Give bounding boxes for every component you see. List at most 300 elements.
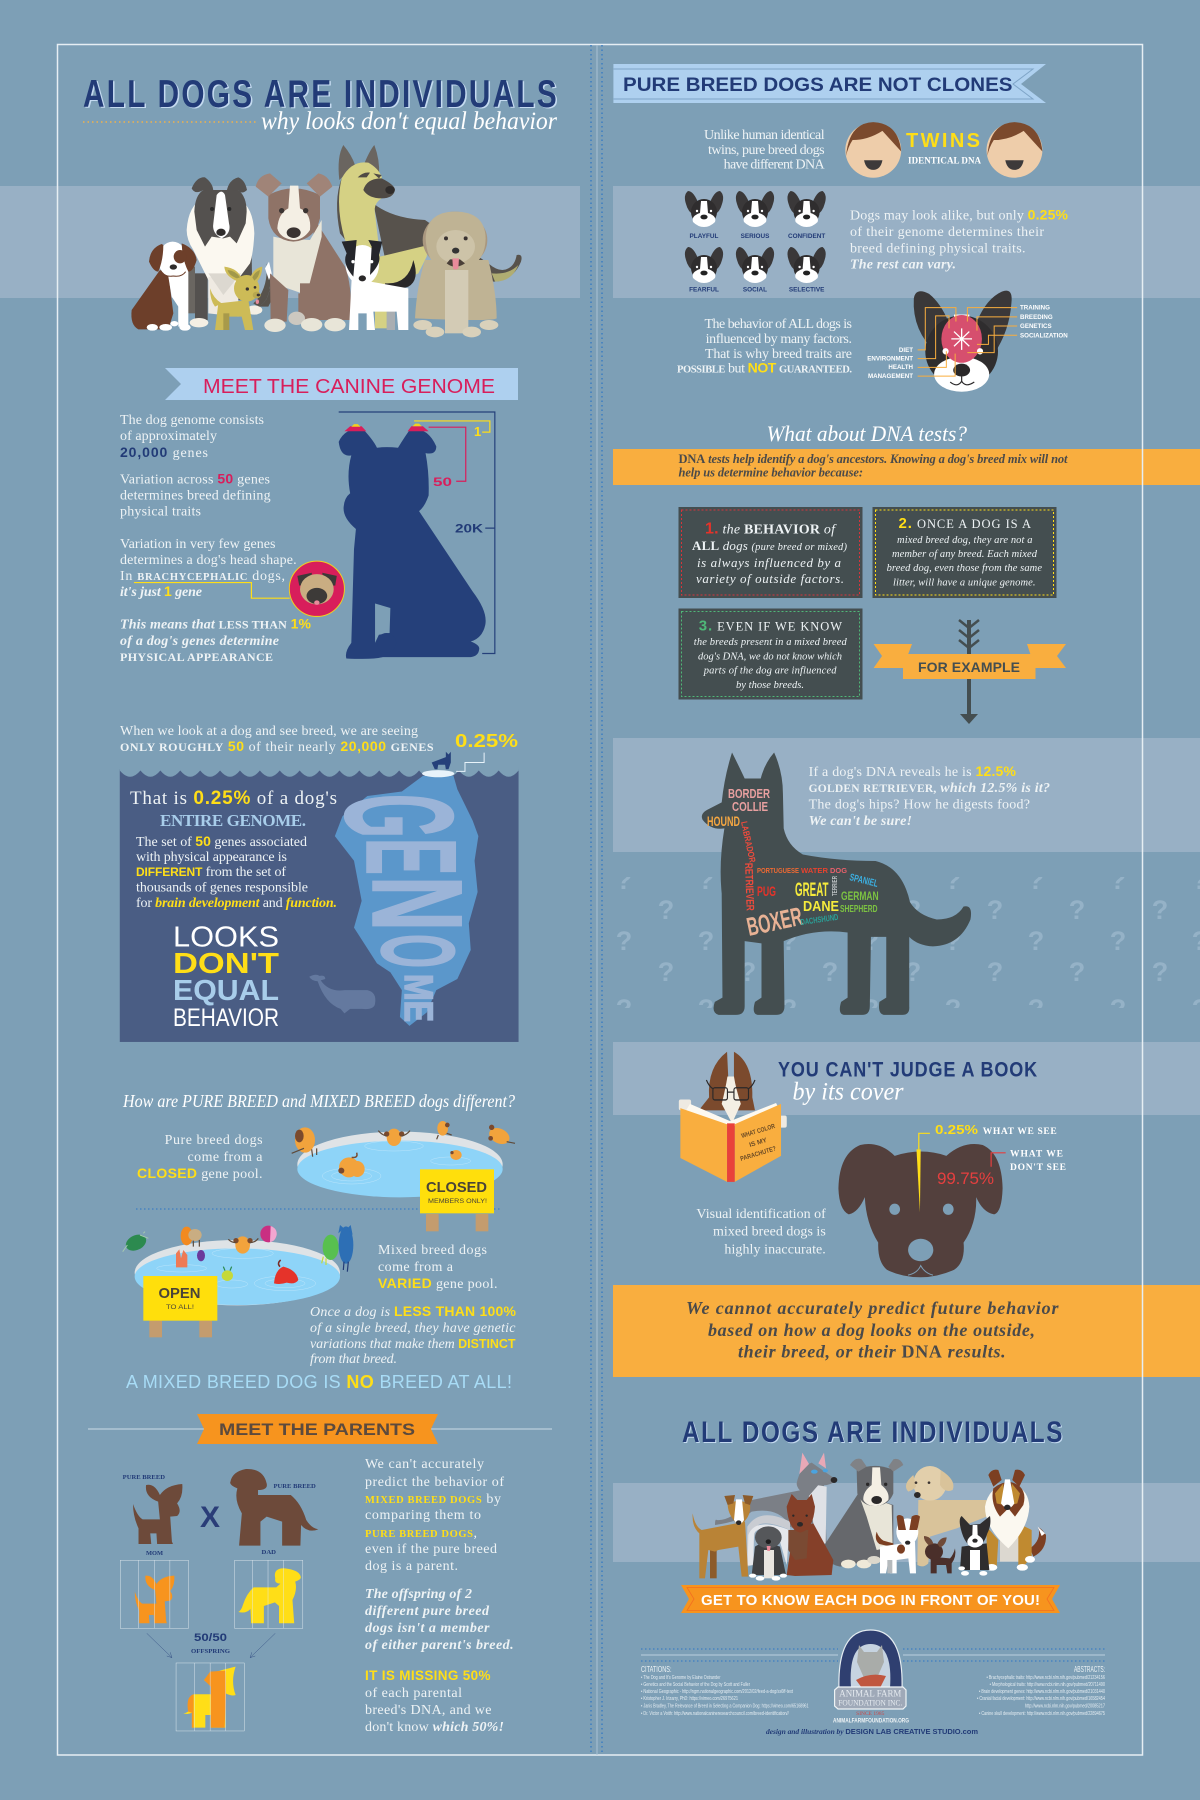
breed names: GERMAN: [841, 889, 879, 903]
text: visual identification: Visual identification of: [696, 1207, 826, 1222]
text: look alike: [850, 206, 1069, 273]
text: parents explanation: comparing them to: [365, 1508, 481, 1523]
chart labels: 1, 50, 20K: [433, 424, 483, 536]
decoration: question mark pattern: ?: [905, 895, 921, 925]
cages: [120, 1560, 303, 1731]
diagram labels: PURE BREED: [274, 1483, 316, 1490]
decoration: question mark pattern: ?: [822, 957, 838, 987]
text: twins: twins, pure breed dogs: [708, 143, 825, 158]
text: parents explanation: don't know which 50%!: [365, 1720, 504, 1735]
illustration: dog reading book: PARACHUTE?: [740, 1145, 777, 1163]
panel copy: with physical appearance is: [136, 850, 287, 865]
sign: closed: [426, 1214, 439, 1231]
title: ALL DOGS ARE INDIVIDUALS: [83, 73, 559, 116]
background bands: [0, 186, 1200, 1562]
decoration: question mark pattern: ?: [658, 895, 674, 925]
slogan: looks don't equal behavior: [173, 921, 279, 1032]
banner: pure breed dogs are not clones: PURE BREED DOGS ARE NOT CLONES: [623, 74, 1012, 96]
illustration: closed gene pool: [292, 1121, 515, 1231]
illustration: dog reading book: WHAT COLOR: [741, 1123, 776, 1140]
panel: reason 2: litter, will have a unique genome.: [893, 578, 1036, 588]
decoration: question mark pattern: ?: [863, 926, 879, 956]
banner: meet the canine genome: MEET THE CANINE GENOME: [203, 376, 495, 398]
text: parents explanation: [365, 1457, 514, 1735]
panel: reason 2: 2. ONCE A DOG IS A: [898, 515, 1031, 532]
dog: jack russell spotted: [876, 1515, 920, 1573]
slogan: looks don't equal behavior: EQUAL: [173, 975, 279, 1007]
panel: reason 3: [678, 608, 862, 700]
panel: reason 1: 1. the BEHAVIOR of: [705, 521, 837, 538]
decoration: question mark pattern: ?: [905, 957, 921, 987]
factor labels: HEALTH: [888, 364, 914, 371]
text block: genome facts: 20,000 genes: [120, 444, 208, 461]
panel: reason 3: the breeds present in a mixed breed: [694, 637, 848, 648]
banner: get to know each dog: [681, 1585, 1060, 1613]
dog: husky: [715, 1453, 837, 1567]
factor labels: DIET: [899, 347, 913, 354]
text: parents explanation: dog is a parent.: [365, 1559, 458, 1574]
text block: genome facts: [120, 413, 312, 664]
text: DNA test intro: [678, 452, 1068, 480]
text block: genome facts: physical traits: [120, 505, 201, 520]
banner: for example: FOR EXAMPLE: [918, 659, 1020, 675]
decoration: question mark pattern: ?: [1028, 994, 1044, 1024]
text: look alike: of their genome determines their: [850, 225, 1044, 240]
banner: for example: [874, 644, 1066, 679]
breed names: HOUND: [707, 813, 740, 829]
banner: meet the parents: MEET THE PARENTS: [219, 1420, 415, 1439]
text: behavior factors: POSSIBLE but NOT GUARANTEED.: [677, 360, 852, 376]
text: parents explanation: dogs isn't a member: [365, 1621, 490, 1636]
sign text: closed: CLOSED: [426, 1179, 487, 1196]
text: varied gene pool: come from a: [378, 1260, 454, 1275]
dog: chihuahua: [210, 267, 262, 330]
icons: six boston terriers with traits: [685, 191, 826, 294]
text: look alike: Dogs may look alike, but only 0.25%: [850, 206, 1069, 224]
text: visual identification: [696, 1207, 826, 1258]
callout: cannot predict behavior: [686, 1298, 1059, 1362]
panel: reason 2: [872, 507, 1056, 598]
text: parents explanation: predict the behavior of: [365, 1475, 504, 1490]
text: varied gene pool: Mixed breed dogs: [378, 1243, 487, 1258]
logo: animal farm foundation: SINCE 1985: [856, 1711, 885, 1717]
banner: meet the canine genome: [165, 368, 518, 400]
decoration: question mark pattern: ?: [698, 865, 714, 895]
callout: cannot predict behavior: their breed, or their DNA results.: [738, 1342, 1006, 1362]
breed names: WATER: [801, 866, 829, 875]
panel: reason 3: parts of the dog are influenced: [703, 666, 837, 677]
dog: tan terrier: [693, 1495, 753, 1578]
breed names: BORDER: [728, 786, 770, 801]
heading: you can't judge a book: by its cover: [792, 1078, 904, 1106]
iceberg word GENOME: N: [345, 876, 488, 931]
logo: animal farm foundation: ANIMALFARMFOUNDATION.ORG: [833, 1719, 909, 1725]
text: closed gene pool: Pure breed dogs: [165, 1133, 263, 1148]
panel: reason 2: member of any breed. Each mixed: [892, 549, 1038, 560]
dog: shaggy terrier: [413, 212, 498, 337]
breed names: DANE: [803, 898, 839, 915]
text block: genome facts: it's just 1 gene: [120, 583, 202, 600]
icons: six boston terriers with traits: SOCIAL: [743, 287, 767, 294]
cross symbol: X: [200, 1501, 220, 1534]
citations: • The Dog and It's Genome by Elaine Ostrander: [641, 1675, 721, 1681]
text: varied gene pool: [310, 1243, 517, 1367]
abstracts: • Canine skull development: http://www.ncbi.nlm.nih.gov/pubmed/22894675: [979, 1711, 1105, 1717]
text: parents explanation: The offspring of 2: [365, 1587, 472, 1602]
title: ALL DOGS ARE INDIVIDUALS: [84, 74, 560, 117]
decoration: question mark pattern: ?: [781, 865, 797, 895]
text: varied gene pool: variations that make them DISTINCT: [310, 1337, 516, 1352]
decoration: question mark pattern: ?: [616, 994, 632, 1024]
diagram: parents and offspring: [120, 1469, 318, 1731]
panel copy: for brain development and function.: [136, 896, 337, 911]
diagram labels: MOM: [146, 1550, 163, 1557]
label: twins identical DNA: TWINS: [906, 130, 980, 152]
breed names: GREAT: [795, 880, 829, 901]
factor labels: SOCIALIZATION: [1020, 332, 1068, 340]
text: looking at a dog: [120, 724, 518, 755]
abstracts: ABSTRACTS:: [1074, 1665, 1105, 1674]
text block: genome facts: Variation in very few genes: [120, 537, 276, 552]
heading: you can't judge a book: [778, 1058, 1038, 1106]
chart labels: [935, 1122, 1066, 1173]
dog: german shepherd: [337, 145, 522, 330]
text block: genome facts: determines breed defining: [120, 488, 271, 504]
text: varied gene pool: from that breed.: [310, 1352, 397, 1367]
slogan: looks don't equal behavior: BEHAVIOR: [173, 1004, 279, 1032]
text: parents explanation: breed's DNA, and we: [365, 1703, 492, 1718]
breed names: LABRADOR: [739, 820, 758, 864]
diagram labels: [123, 1474, 316, 1655]
decoration: question mark pattern: ?: [1152, 957, 1168, 987]
statement: no breed at all: A MIXED BREED DOG IS NO BREED AT ALL!: [126, 1372, 512, 1392]
panel: reason 2: breed dog, even those from the same: [887, 563, 1042, 574]
decoration: question mark pattern: ?: [945, 926, 961, 956]
panel copy: thousands of genes responsible: [136, 880, 308, 896]
panel: reason 3: by those breeds.: [736, 680, 804, 691]
diagram labels: PURE BREED: [123, 1474, 165, 1481]
dog: yellow lab: [906, 1466, 987, 1566]
chart labels: 1, 50, 20K: 1: [474, 424, 481, 439]
decoration: question mark pattern: ?: [698, 994, 714, 1024]
abstracts: [977, 1665, 1105, 1717]
text: looking at a dog: ONLY ROUGHLY 50 of their nearly 20,000 GENES: [120, 738, 434, 755]
label: twins identical DNA: IDENTICAL DNA: [908, 156, 982, 166]
text block: genome facts: of a dog's genes determine: [120, 634, 279, 649]
banner: pure breed dogs are not clones: [613, 64, 1046, 103]
text: closed gene pool: CLOSED gene pool.: [137, 1165, 262, 1182]
panel: reason 3: 3. EVEN IF WE KNOW: [699, 618, 842, 634]
illustration: dog made of breed names: [702, 753, 971, 1015]
label: twins identical DNA: [906, 130, 982, 166]
text: which 12.5%: GOLDEN RETRIEVER, which 12.5% is it?: [809, 781, 1050, 796]
text block: genome facts: The dog genome consists: [120, 413, 264, 428]
text block: genome facts: Variation across 50 genes: [120, 470, 270, 488]
decoration: question mark pattern: ?: [1110, 994, 1126, 1024]
dog: rough collie: [985, 1470, 1046, 1571]
icon: yellow pup: [238, 1568, 301, 1623]
mixed-breed dogs: [123, 1225, 353, 1284]
text: behavior factors: [677, 317, 852, 376]
icon: chihuahua mom: [133, 1484, 182, 1544]
text: parents explanation: even if the pure breed: [365, 1542, 497, 1557]
factor labels: MANAGEMENT: [868, 373, 913, 380]
text block: genome facts: determines a dog's head shape.: [120, 553, 297, 568]
arrow: down to example: [959, 620, 979, 724]
iceberg word GENOME: [313, 794, 488, 1022]
abstracts: • Brachycephalic traits: http://www.ncbi.nlm.nih.gov/pubmed/21234156: [986, 1675, 1105, 1681]
decoration: question mark pattern: ?: [1028, 926, 1044, 956]
sign text: closed: MEMBERS ONLY!: [428, 1198, 487, 1205]
citations: • Kristopher J. Irizarry, PhD: https://vimeo.com/26975621: [641, 1696, 738, 1702]
text: visual identification: mixed breed dogs is: [713, 1225, 826, 1240]
decoration: question mark pattern: ?: [987, 957, 1003, 987]
panel: reason 1: [678, 507, 862, 598]
text: DNA test intro: help us determine behavior because:: [678, 466, 863, 480]
panel copy: ENTIRE GENOME.: [160, 811, 306, 830]
heading: what about DNA tests: What about DNA tests?: [766, 421, 967, 446]
heading: pure vs mixed: How are PURE BREED and MIXED BREED dogs different?: [122, 1091, 515, 1111]
decoration: question mark pattern: ?: [658, 957, 674, 987]
text: parents explanation: MIXED BREED DOGS by: [365, 1492, 501, 1507]
icon: big dog dad: [230, 1469, 318, 1546]
illustration: closing group of ten dogs: [693, 1453, 1046, 1581]
icons: six boston terriers with traits: PLAYFUL: [690, 233, 719, 240]
icons: six boston terriers with traits: FEARFUL: [689, 287, 719, 294]
decoration: question mark pattern: ?: [616, 926, 632, 956]
dog: red brown: [787, 1494, 833, 1576]
panel: iceberg genome: [120, 752, 519, 1042]
text: parents explanation: PURE BREED DOGS,: [365, 1526, 477, 1541]
text: looking at a dog: When we look at a dog and see breed, we are seeing: [120, 724, 418, 739]
text: DNA test intro: DNA tests help identify a dog's ancestors. Knowing a dog's breed mix will not: [678, 452, 1068, 466]
citations: • National Geographic - http://ngm.nationalgeographic.com/2012/02/feed-a-dog/ss6ff-text: [641, 1689, 793, 1695]
text block: genome facts: This means that LESS THAN 1%: [120, 616, 312, 632]
diagram labels: DAD: [262, 1549, 276, 1556]
illustration: group of six dogs: [131, 145, 522, 337]
iceberg: [335, 776, 478, 1026]
callout: cannot predict behavior: based on how a dog looks on the outside,: [708, 1320, 1035, 1340]
panel: reason 1: ALL dogs (pure breed or mixed): [692, 538, 848, 553]
icon: orange pup: [135, 1576, 174, 1623]
text: parents explanation: different pure breed: [365, 1604, 490, 1619]
panel background with wave edge: [120, 752, 519, 1042]
decoration: question mark pattern: ?: [945, 865, 961, 895]
text: behavior factors: That is why breed traits are: [705, 347, 852, 362]
text: closed gene pool: come from a: [188, 1150, 263, 1165]
icons: six boston terriers with traits: SERIOUS: [741, 233, 770, 240]
text: which 12.5%: [809, 763, 1050, 829]
text: which 12.5%: If a dog's DNA reveals he is 12.5%: [809, 763, 1017, 780]
banner: get to know each dog: GET TO KNOW EACH DOG IN FRONT OF YOU!: [701, 1592, 1040, 1609]
chart: dog head 0.25% vs 99.75%: 99.75%: [937, 1169, 994, 1188]
breed names: PORTUGUESE: [757, 866, 799, 875]
text: parents explanation: of either parent's breed.: [365, 1638, 514, 1653]
text: varied gene pool: VARIED gene pool.: [378, 1275, 498, 1292]
decoration: question mark pattern: ?: [740, 957, 756, 987]
factor labels: ENVIRONMENT: [867, 356, 913, 362]
panel copy: The set of 50 genes associated: [136, 833, 307, 850]
footer rules: [641, 1649, 1105, 1661]
diagram labels: 50/50: [194, 1632, 227, 1644]
iceberg word GENOME: ME: [396, 974, 440, 1022]
citations: • Janis Bradley, The Relevance of Breed in Selecting a Companion Dog: https://vimeo.com/65168961: [641, 1704, 809, 1710]
citations: CITATIONS:: [641, 1665, 672, 1674]
citations: • Dr. Victor a Voith: http://www.nationalcanineresearchcouncil.com/breed-identification//: [641, 1711, 789, 1717]
subtitle: why looks don't equal behavior: [261, 108, 557, 135]
icon: two-tone offspring: [183, 1667, 236, 1728]
credit line: design and illustration by DESIGN LAB CREATIVE STUDIO.com: [766, 1727, 978, 1736]
text: behavior factors: influenced by many factors.: [706, 332, 852, 347]
panel copy: [130, 788, 337, 911]
decoration: question mark pattern: [617, 877, 1200, 1008]
breed names: TERRIER: [832, 876, 839, 896]
citations: [641, 1665, 809, 1717]
decoration: question mark pattern: ?: [945, 994, 961, 1024]
decoration: question mark pattern: ?: [863, 994, 879, 1024]
sign text: open: OPEN: [158, 1285, 200, 1302]
abstracts: http://www.ncbi.nlm.nih.gov/pubmed/20085217: [1025, 1704, 1105, 1710]
text block: genome facts: In BRACHYCEPHALIC dogs,: [120, 569, 285, 584]
chart: dog head 0.25% vs 99.75%: [838, 1122, 1066, 1277]
illustration: dog reading book: [679, 1052, 787, 1182]
text: twins: Unlike human identical: [704, 128, 825, 143]
callout: cannot predict behavior: We cannot accurately predict future behavior: [686, 1298, 1059, 1318]
factor labels: BREEDING: [1020, 314, 1053, 321]
iceberg word GENOME: G: [313, 794, 485, 838]
pure-breed dogs: [292, 1121, 515, 1177]
breed names: DOG: [830, 866, 847, 875]
closing title: ALL DOGS ARE INDIVIDUALS: [682, 1416, 1064, 1449]
sign text: open: [158, 1285, 200, 1311]
icons: six boston terriers with traits: CONFIDENT: [788, 233, 825, 240]
dog: collie: [187, 177, 270, 327]
decoration: question mark pattern: ?: [698, 926, 714, 956]
panel copy: DIFFERENT from the set of: [136, 865, 286, 880]
decoration: question mark pattern: ?: [781, 994, 797, 1024]
iceberg word GENOME: O: [359, 934, 475, 968]
text block: genome facts: of approximately: [120, 429, 217, 444]
sign text: closed: [426, 1179, 487, 1205]
text: parents explanation: IT IS MISSING 50%: [365, 1668, 490, 1683]
breed names: DACHSHUND: [800, 912, 839, 927]
text: which 12.5%: The dog's hips? How he digests food?: [809, 798, 1030, 812]
text: varied gene pool: Once a dog is LESS THAN 100%: [310, 1303, 517, 1320]
panel: reason 3: dog's DNA, we do not know which: [698, 651, 842, 662]
dog: brown pit bull: [256, 173, 352, 332]
illustration: open gene pool: [123, 1225, 353, 1337]
icon: twins faces: [845, 122, 1042, 178]
sign: open: [149, 1321, 162, 1337]
chart: dog silhouette showing 20K, 50 and 1 genes: [339, 412, 495, 659]
breed names: COLLIE: [732, 799, 768, 814]
iceberg word GENOME: E: [339, 838, 482, 875]
abstracts: • Cranial facial development: http://www.ncbi.nlm.nih.gov/pubmed/16582454: [977, 1696, 1105, 1702]
breed names: SPANIEL: [848, 872, 879, 890]
diagram labels: OFFSPRING: [191, 1648, 230, 1655]
chart labels: 0.25%: [935, 1122, 978, 1137]
text: look alike: The rest can vary.: [850, 258, 956, 273]
decoration: question mark pattern: ?: [1110, 865, 1126, 895]
chart labels: WHAT WE SEE: [983, 1127, 1057, 1137]
factor labels: [867, 304, 1068, 380]
slogan: looks don't equal behavior: LOOKS: [173, 921, 279, 953]
breed names: PUG: [757, 883, 776, 899]
closing title: ALL DOGS ARE INDIVIDUALS: [683, 1417, 1065, 1450]
text block: genome facts: PHYSICAL APPEARANCE: [120, 650, 273, 664]
logo: animal farm foundation: FOUNDATION INC.: [838, 1698, 902, 1708]
decoration: question mark pattern: ?: [1110, 926, 1126, 956]
text: varied gene pool: of a single breed, they have genetic: [310, 1321, 516, 1336]
decoration: question mark pattern: ?: [1152, 895, 1168, 925]
breed names: [707, 786, 879, 942]
abstracts: • Brain development genes: http://www.ncbi.nlm.nih.gov/pubmed/21031440: [979, 1689, 1105, 1695]
decoration: question mark pattern: ?: [863, 865, 879, 895]
breed names: SHEPHERD: [840, 904, 878, 915]
sign text: open: TO ALL!: [166, 1304, 194, 1311]
text: parents explanation: of each parental: [365, 1686, 462, 1701]
text: which 12.5%: We can't be sure!: [809, 814, 912, 829]
text: twins: have different DNA: [724, 158, 825, 172]
text: look alike: breed defining physical traits.: [850, 242, 1026, 257]
panel: reason 1: variety of outside factors.: [696, 571, 844, 586]
icon: dog on iceberg: [432, 752, 451, 769]
dog: brown and white spaniel: [131, 242, 197, 331]
panel: reason 2: mixed breed dog, they are not a: [897, 535, 1032, 546]
decoration: question mark pattern: ?: [781, 926, 797, 956]
text: parents explanation: We can't accurately: [365, 1457, 484, 1472]
heading: you can't judge a book: YOU CAN'T JUDGE A BOOK: [778, 1058, 1038, 1082]
slogan: looks don't equal behavior: DON'T: [173, 948, 279, 980]
arrows to offspring: [147, 1633, 275, 1658]
abstracts: • Morphological traits: http://www.ncbi.nlm.nih.gov/pubmed/20711490: [990, 1682, 1105, 1688]
decoration: question mark pattern: ?: [1069, 957, 1085, 987]
decoration: question mark pattern: ?: [616, 865, 632, 895]
citations: • Genetics and the Social Behavior of the Dog by Scott and Fuller: [641, 1682, 750, 1688]
decoration: question mark pattern: ?: [1069, 895, 1085, 925]
decoration: question mark pattern: ?: [822, 895, 838, 925]
dog: shaggy black: [749, 1526, 787, 1581]
text: visual identification: highly inaccurate.: [724, 1242, 826, 1258]
breed names: BOXER: [744, 901, 805, 942]
panel: reason 1: is always influenced by a: [697, 555, 842, 570]
factor labels: GENETICS: [1020, 323, 1052, 330]
decoration: question mark pattern: ?: [740, 895, 756, 925]
panel copy: That is 0.25% of a dog's: [130, 788, 337, 809]
dog: grey pit bull: [823, 1459, 903, 1568]
logo: animal farm foundation: ANIMAL FARM: [839, 1688, 901, 1698]
decoration: question mark pattern: ?: [987, 895, 1003, 925]
chart labels: 1, 50, 20K: 50: [433, 475, 452, 489]
text: behavior factors: The behavior of ALL dogs is: [704, 317, 852, 332]
factor labels: TRAINING: [1020, 304, 1050, 312]
logo: animal farm foundation: [833, 1630, 909, 1725]
breed names: RETRIEVER: [742, 863, 756, 911]
icons: six boston terriers with traits: SELECTIVE: [789, 287, 825, 294]
dog: small chihuahua: [924, 1536, 955, 1573]
icon: whale: [309, 975, 375, 1013]
diagram: boston terrier brain factors: [867, 291, 1068, 392]
chart labels: WHAT WE: [1010, 1149, 1063, 1159]
chart labels: DON'T SEE: [1010, 1163, 1066, 1173]
chart labels: 1, 50, 20K: 20K: [455, 522, 483, 536]
dog: jack russell: [342, 240, 416, 330]
text: twins: [704, 128, 825, 172]
dog: boston terrier: [958, 1516, 996, 1576]
illustration: dog reading book: IS MY: [749, 1137, 768, 1149]
text: closed gene pool: [137, 1133, 263, 1182]
decoration: question mark pattern: ?: [1028, 865, 1044, 895]
